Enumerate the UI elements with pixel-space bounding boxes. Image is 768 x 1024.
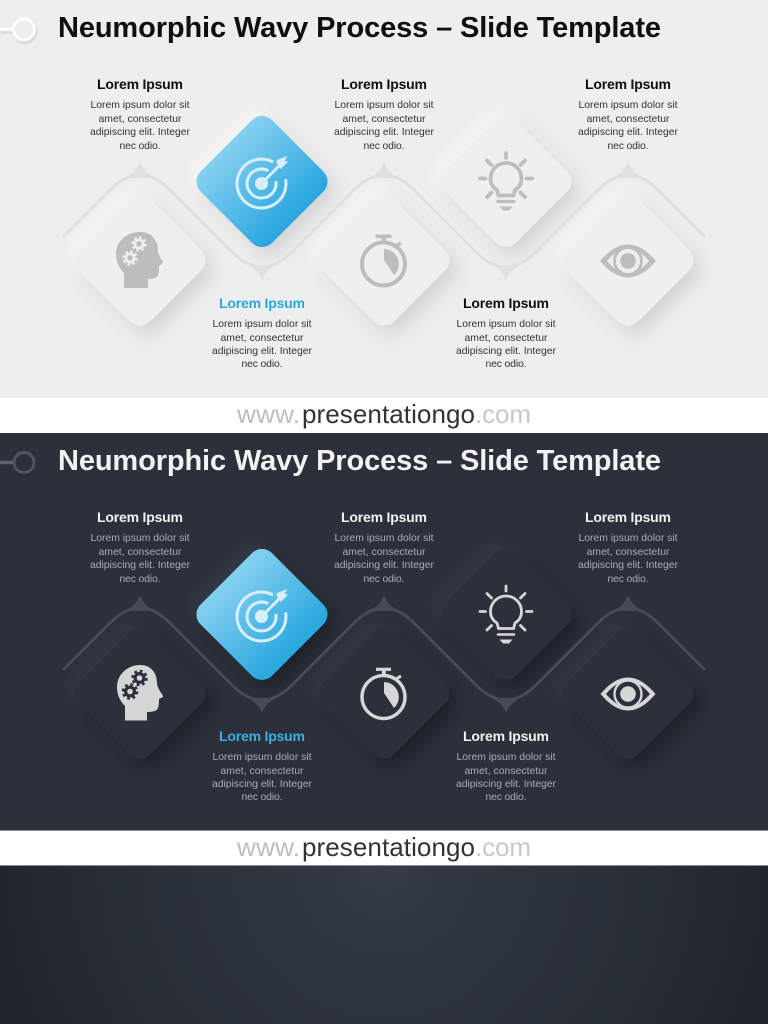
icon: light bulb	[480, 153, 532, 210]
diamond: eye	[557, 189, 699, 332]
step 5 heading and text	[578, 509, 679, 585]
step 1 heading and text: Lorem ipsum dolor sit	[90, 100, 190, 111]
step 3 heading and text: Lorem ipsum dolor sit	[334, 100, 434, 111]
step 1 heading and text: Lorem Ipsum	[97, 76, 183, 92]
footer band: light slide: www.	[236, 399, 300, 429]
step 4 heading and text: amet, consectetur	[464, 766, 548, 777]
step 1 heading and text: adipiscing elit. Integer	[90, 127, 191, 138]
step 3 heading and text: nec odio.	[364, 141, 404, 152]
step 3 heading and text: adipiscing elit. Integer	[334, 560, 435, 571]
diamond: target (highlighted)	[191, 543, 333, 686]
diamond: light bulb	[435, 110, 577, 253]
step 1 heading and text	[90, 76, 191, 152]
diamond: target (highlighted)	[191, 110, 333, 253]
panel: dark slide	[0, 433, 768, 830]
step 3 heading and text	[334, 509, 435, 585]
step 5 heading and text: nec odio.	[608, 141, 648, 152]
icon: stopwatch	[362, 234, 405, 286]
diamond: stopwatch	[313, 189, 455, 332]
step 3 heading and text: adipiscing elit. Integer	[334, 127, 435, 138]
header connector	[0, 452, 34, 472]
step 3 heading and text: nec odio.	[364, 574, 404, 585]
diamond: stopwatch	[313, 622, 455, 765]
icon: target with arrow	[237, 156, 288, 208]
step 4 heading and text: adipiscing elit. Integer	[456, 779, 557, 790]
diamond: head with gears	[69, 622, 211, 765]
step 4 heading and text: nec odio.	[486, 359, 526, 370]
step 5 heading and text: adipiscing elit. Integer	[578, 560, 679, 571]
wavy line	[64, 162, 704, 280]
step 5 heading and text: Lorem ipsum dolor sit	[578, 533, 678, 544]
footer band: light slide: presentationgo	[302, 399, 475, 429]
step 5 heading and text: Lorem ipsum dolor sit	[578, 100, 678, 111]
step 3 heading and text: amet, consectetur	[342, 547, 426, 558]
icon: target with arrow	[237, 589, 288, 641]
footer band: dark slide	[0, 830, 768, 866]
step 4 heading and text: Lorem Ipsum	[463, 728, 549, 744]
step 1 heading and text: nec odio.	[120, 574, 160, 585]
panel: light slide	[0, 0, 768, 398]
footer band: dark slide: .com	[475, 832, 531, 862]
icon: head with gears	[117, 665, 163, 720]
step 3 heading and text: Lorem Ipsum	[341, 76, 427, 92]
step 2 heading and text: nec odio.	[242, 359, 282, 370]
step 1 heading and text: amet, consectetur	[98, 114, 182, 125]
step 4 heading and text: Lorem ipsum dolor sit	[456, 752, 556, 763]
diamond: eye	[557, 622, 699, 765]
step 2 heading and text: adipiscing elit. Integer	[212, 346, 313, 357]
icon: eye	[600, 244, 656, 278]
footer band: light slide: .com	[475, 399, 531, 429]
step 2 heading and text: Lorem ipsum dolor sit	[212, 752, 312, 763]
footer band: dark slide: presentationgo	[302, 832, 475, 862]
step 2 heading and text: Lorem Ipsum	[219, 728, 305, 744]
footer band: dark slide: www.	[236, 832, 300, 862]
step 4 heading and text: Lorem ipsum dolor sit	[456, 319, 556, 330]
step 2 heading and text: amet, consectetur	[220, 333, 304, 344]
title: Neumorphic Wavy Process – Slide Template	[58, 12, 661, 44]
step 5 heading and text: nec odio.	[608, 574, 648, 585]
step 4 heading and text: Lorem Ipsum	[463, 295, 549, 311]
step 1 heading and text: nec odio.	[120, 141, 160, 152]
step 2 heading and text: nec odio.	[242, 792, 282, 803]
step 3 heading and text: Lorem ipsum dolor sit	[334, 533, 434, 544]
step 2 heading and text: amet, consectetur	[220, 766, 304, 777]
step 2 heading and text	[212, 295, 313, 370]
diamond: head with gears	[69, 189, 211, 332]
icon: eye	[600, 678, 656, 710]
step 5 heading and text: Lorem Ipsum	[585, 509, 671, 525]
step 4 heading and text	[456, 728, 557, 803]
step 3 heading and text: amet, consectetur	[342, 114, 426, 125]
step 4 heading and text: nec odio.	[486, 792, 526, 803]
title: Neumorphic Wavy Process – Slide Template	[58, 445, 661, 477]
step 1 heading and text: adipiscing elit. Integer	[90, 560, 191, 571]
icon: light bulb	[480, 586, 532, 644]
step 1 heading and text: Lorem Ipsum	[97, 509, 183, 525]
footer band: light slide	[0, 398, 768, 433]
step 1 heading and text	[90, 509, 191, 585]
step 2 heading and text: adipiscing elit. Integer	[212, 779, 313, 790]
step 2 heading and text: Lorem Ipsum	[219, 295, 305, 311]
step 4 heading and text	[456, 295, 557, 370]
wavy line	[64, 595, 704, 713]
step 4 heading and text: adipiscing elit. Integer	[456, 346, 557, 357]
header connector	[0, 19, 34, 40]
step 1 heading and text: amet, consectetur	[98, 547, 182, 558]
icon: head with gears	[116, 232, 163, 288]
step 5 heading and text: amet, consectetur	[586, 547, 670, 558]
step 3 heading and text: Lorem Ipsum	[341, 509, 427, 525]
step 1 heading and text: Lorem ipsum dolor sit	[90, 533, 190, 544]
step 5 heading and text: adipiscing elit. Integer	[578, 127, 679, 138]
step 5 heading and text	[578, 76, 679, 152]
step 3 heading and text	[334, 76, 435, 152]
step 5 heading and text: amet, consectetur	[586, 114, 670, 125]
bottom dark gradient area	[0, 866, 768, 1024]
icon: stopwatch	[362, 668, 405, 718]
step 4 heading and text: amet, consectetur	[464, 333, 548, 344]
step 5 heading and text: Lorem Ipsum	[585, 76, 671, 92]
diamond: light bulb	[435, 543, 577, 686]
step 2 heading and text: Lorem ipsum dolor sit	[212, 319, 312, 330]
step 2 heading and text	[212, 728, 313, 803]
